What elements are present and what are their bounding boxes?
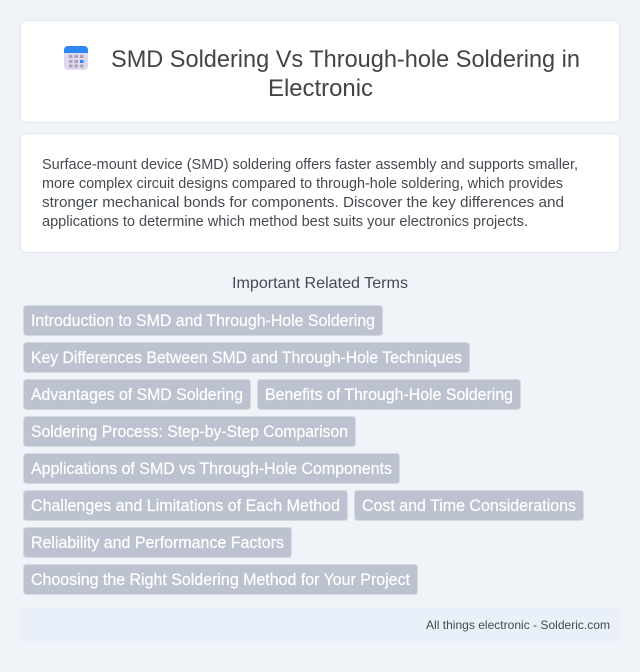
tag: advantages xyxy=(24,380,250,410)
panel: intro text: Surface-mount device (SMD) soldering offers faster assembly and supports smaller, xyxy=(42,157,578,173)
tag: introduction: Introduction to SMD and Through-Hole Soldering xyxy=(31,312,375,330)
tag: choosing: Choosing the Right Soldering Method for Your Project xyxy=(31,571,410,589)
tag: advantages: Advantages of SMD Soldering xyxy=(31,386,243,404)
tag: cost and time: Cost and Time Considerations xyxy=(362,497,576,515)
footer: All things electronic - Solderic.com xyxy=(426,618,610,632)
panel: intro text: more complex circuit designs compared to through-hole soldering, which provides xyxy=(42,176,563,192)
tag: choosing xyxy=(24,564,418,594)
tag: key differences xyxy=(24,342,470,372)
tag: soldering process xyxy=(24,416,356,446)
tag: challenges: Challenges and Limitations of Each Method xyxy=(31,497,340,515)
heading: important related terms: Important Related Terms xyxy=(232,275,408,292)
heading: title xyxy=(111,46,580,102)
panel: intro text: stronger mechanical bonds for components. Discover the key differences and xyxy=(42,195,564,211)
panel: title card xyxy=(20,20,620,122)
tag: key differences: Key Differences Between SMD and Through-Hole Techniques xyxy=(31,349,462,367)
heading: title: SMD Soldering Vs Through-hole Soldering in xyxy=(111,46,580,73)
tag: benefits xyxy=(258,380,520,410)
tag: reliability: Reliability and Performance Factors xyxy=(31,534,284,552)
tag: benefits: Benefits of Through-Hole Soldering xyxy=(265,386,513,404)
tag: cost and time xyxy=(354,490,584,520)
icon: calendar xyxy=(64,46,88,70)
tag: applications xyxy=(24,454,400,484)
footer xyxy=(20,608,620,642)
heading: title: Electronic xyxy=(268,75,373,102)
panel: intro text: applications to determine which method best suits your electronics projects. xyxy=(42,214,528,230)
tag: soldering process: Soldering Process: Step-by-Step Comparison xyxy=(31,423,348,441)
tag: introduction xyxy=(24,306,382,336)
tag: applications: Applications of SMD vs Through-Hole Components xyxy=(31,460,392,478)
tag: challenges xyxy=(24,490,348,520)
panel: intro text xyxy=(20,134,620,252)
tag: reliability xyxy=(24,528,292,558)
